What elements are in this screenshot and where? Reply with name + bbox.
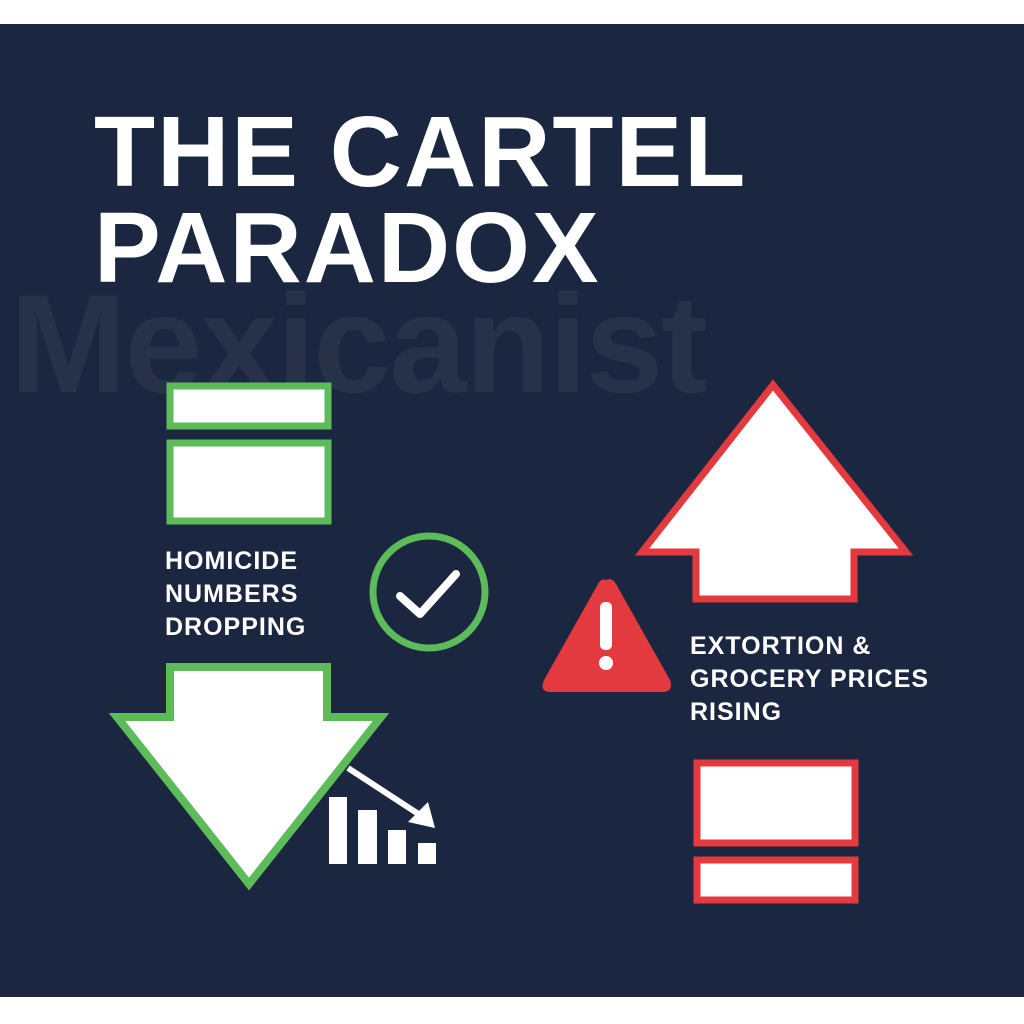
watermark: Mexicanist [10,265,706,422]
label: extortion: GROCERY PRICES [690,665,929,693]
icon: red bars [697,763,855,900]
label: homicide [165,547,306,641]
label: homicide: NUMBERS [165,580,298,608]
icon: down arrow [117,667,381,884]
title: THE CARTEL [94,96,747,208]
label: extortion: RISING [690,698,782,726]
label: homicide: DROPPING [165,613,306,641]
title [94,96,747,304]
icon: warning triangle [543,579,671,692]
label: extortion [690,632,929,726]
icon: falling bar chart [329,768,436,864]
title: PARADOX [94,192,601,304]
icon: green bars [170,386,328,521]
label: extortion: EXTORTION & [690,632,871,660]
label: homicide: HOMICIDE [165,547,298,575]
icon: check circle [373,536,485,648]
icon: up arrow [642,385,906,599]
